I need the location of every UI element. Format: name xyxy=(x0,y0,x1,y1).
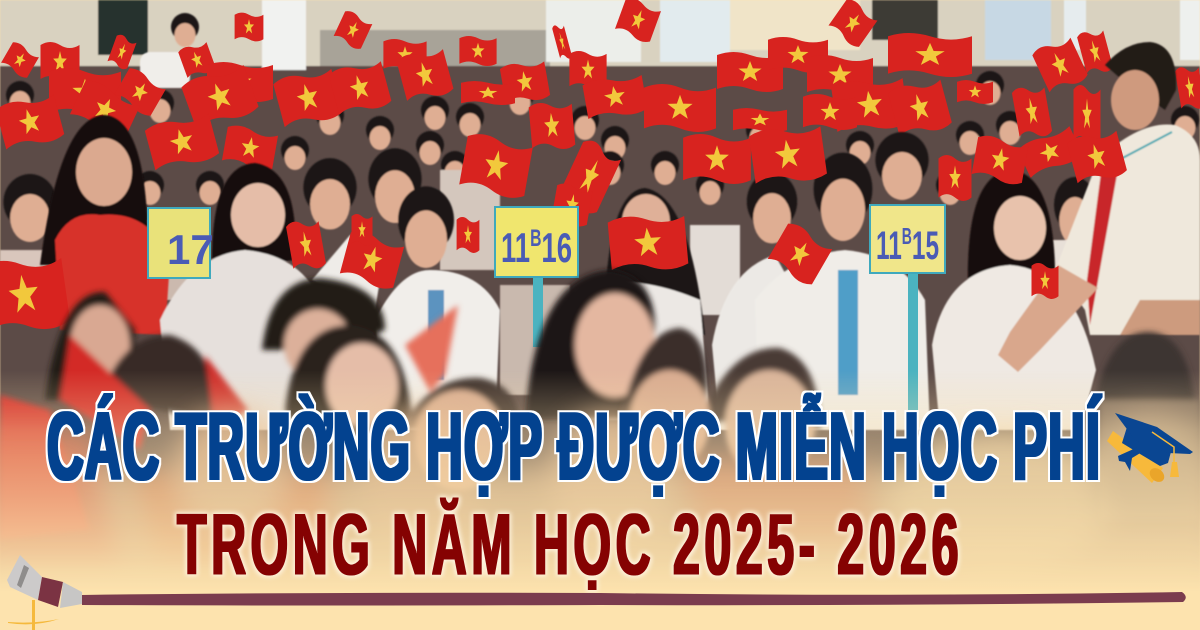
icon: graduation cap and diploma xyxy=(1107,413,1193,485)
faded lower photo area xyxy=(0,410,1200,600)
placard: class 11B16 xyxy=(495,207,578,347)
placard: class 11B16: B xyxy=(530,225,541,252)
placard: class 11B15: B xyxy=(902,223,912,249)
cream gradient overlay xyxy=(0,370,1200,592)
placard: class 11B15: 11 xyxy=(876,224,918,268)
icon: paint brush xyxy=(7,555,82,608)
cream footer band xyxy=(0,591,1200,630)
flags: back row xyxy=(0,0,1200,180)
placard: class 17: 17 xyxy=(167,226,214,273)
students: middle rows xyxy=(40,42,1200,430)
placard: class 11B15 xyxy=(870,205,945,410)
placard: class 11B16: 16 xyxy=(541,224,572,271)
placard: class 11B15: 15 xyxy=(912,224,939,268)
icon: yellow sparkle xyxy=(8,600,59,630)
placard: class 17 xyxy=(148,208,214,278)
crowd: distant students xyxy=(0,13,1199,395)
brush stroke underline xyxy=(82,592,1186,606)
placard: class 11B16: 11 xyxy=(501,224,545,271)
blurred foreground students xyxy=(0,270,1200,540)
flags: front row xyxy=(0,122,1128,337)
